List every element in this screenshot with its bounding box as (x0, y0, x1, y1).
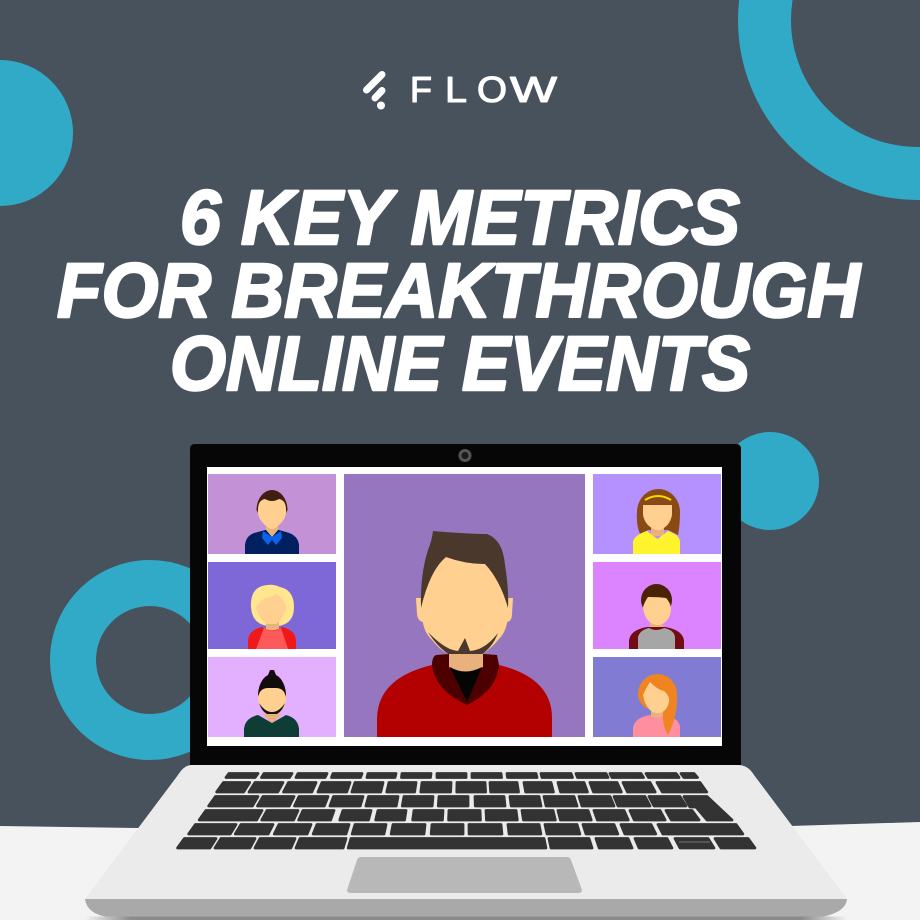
key row 2 (217, 782, 707, 792)
video tile: main speaker (344, 474, 585, 737)
trackpad (347, 857, 582, 893)
enter key (684, 796, 732, 820)
video tile: man in gray tee (593, 562, 721, 649)
logo wordmark: L (445, 69, 467, 110)
keyboard (178, 774, 755, 848)
title line 3: ONLINE EVENTS (170, 321, 750, 407)
key row 5 (189, 824, 743, 834)
logo wordmark: F (410, 69, 432, 110)
key row 6 (178, 838, 755, 848)
key row 4 (199, 810, 699, 820)
laptop base (85, 765, 847, 899)
video tile: man with top knot (208, 657, 336, 737)
decorative circle: left (0, 60, 73, 206)
title (57, 175, 861, 407)
title line 1: 6 KEY METRICS (180, 175, 740, 261)
speaker collar (432, 654, 499, 705)
logo icon (366, 74, 385, 110)
speaker neck (449, 650, 482, 674)
speaker black shirt (450, 667, 482, 702)
speaker sweater (377, 665, 552, 737)
key row 3 (209, 796, 686, 806)
logo: Flow (366, 69, 557, 110)
laptop underside (85, 899, 847, 917)
video tile: woman with headband (593, 474, 721, 554)
webcam (458, 449, 472, 462)
decorative ring: lower left (73, 583, 227, 737)
laptop (85, 444, 847, 920)
speaker beard (428, 632, 498, 662)
video tile: man in navy sweater (208, 474, 336, 554)
speaker ears (416, 598, 513, 622)
screen (207, 467, 722, 746)
video tile: woman with orange hair (593, 657, 721, 737)
logo wordmark: W (510, 69, 557, 110)
decorative circle: behind laptop (721, 432, 819, 530)
speaker hair (421, 531, 508, 608)
key detail line (679, 842, 710, 843)
speaker neck front (449, 654, 483, 672)
speaker face (422, 557, 508, 658)
decorative ring: top right (764, 0, 920, 174)
key row 1 (226, 774, 698, 778)
screen bezel (190, 444, 741, 765)
video tile: blonde woman (208, 562, 336, 649)
laptop base shadow line (85, 916, 847, 920)
logo wordmark (410, 69, 557, 110)
logo wordmark: O (477, 69, 507, 110)
title line 2: FOR BREAKTHROUGH (57, 248, 861, 334)
desk surface (0, 822, 920, 920)
